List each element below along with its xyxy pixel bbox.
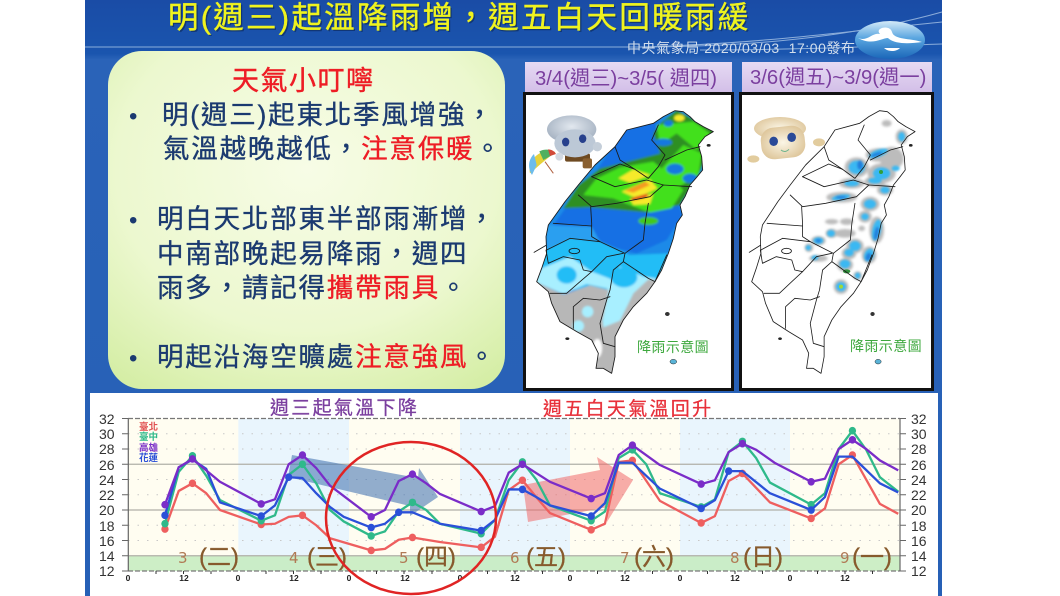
- label: rain diagram: 降雨示意圖: [637, 339, 709, 355]
- x axis hour labels: 12: [289, 573, 299, 583]
- x axis hour labels: 12: [510, 573, 520, 583]
- left axis labels: 26: [99, 457, 115, 473]
- x axis hour labels: 12: [730, 573, 740, 583]
- right axis labels: 22: [911, 487, 927, 503]
- left axis labels: [99, 411, 115, 579]
- right axis labels: 14: [911, 548, 927, 564]
- left axis labels: 16: [99, 533, 115, 549]
- panel: rain map 3/6-3/9: [740, 94, 932, 390]
- chart heading: rising: 週五白天氣溫回升: [543, 398, 713, 420]
- day labels: 7: [620, 549, 630, 567]
- left axis labels: 20: [99, 502, 115, 518]
- legend: 臺北: [139, 421, 159, 433]
- heading: tips: 天氣小叮嚀: [232, 66, 374, 96]
- x axis hour labels: [126, 573, 850, 583]
- right axis labels: 28: [911, 441, 927, 457]
- legend: 臺中: [139, 431, 158, 443]
- right axis labels: 20: [911, 502, 927, 518]
- title: 明(週三)起溫降雨增，週五白天回暖雨緩: [170, 2, 752, 36]
- line: Taipei: [161, 451, 898, 554]
- x axis hour labels: 0: [568, 573, 573, 583]
- date tab 2: [742, 62, 932, 92]
- x axis hour labels: 12: [179, 573, 189, 583]
- right axis labels: 12: [911, 563, 927, 579]
- day labels: (三): [307, 544, 347, 571]
- panel: rain map 3/4-3/5: [524, 94, 732, 390]
- panel: weather tips: [108, 51, 505, 389]
- label: rain diagram: 降雨示意圖: [850, 338, 922, 354]
- day labels: 8: [730, 549, 740, 567]
- bullet text 3: 明起沿海空曠處注意強風。: [157, 342, 497, 372]
- date tab 2: 3/6(週五)~3/9(週一): [750, 66, 926, 89]
- header swooshes: [85, 12, 942, 50]
- line: Kaohsiung: [161, 436, 898, 521]
- x axis hour labels: 0: [126, 573, 131, 583]
- bullet text 1: 明(週三)起東北季風增強，: [162, 100, 495, 130]
- callout: red circle on Thursday: [326, 442, 496, 594]
- legend: 花蓮: [139, 452, 159, 464]
- map: scattered rain: [749, 111, 915, 373]
- line: Hualien: [161, 457, 898, 534]
- bullet text 1: •: [129, 103, 137, 130]
- line: Taichung: [161, 427, 898, 540]
- x axis hour labels: 0: [347, 573, 352, 583]
- day labels: (二): [199, 544, 239, 571]
- right axis labels: 30: [911, 426, 927, 442]
- bullet text 2: 明白天北部東半部雨漸增，: [157, 204, 497, 234]
- day labels: 5: [399, 549, 409, 567]
- x axis hour labels: 0: [236, 573, 241, 583]
- day labels: (一): [852, 544, 892, 571]
- x axis hour labels: 0: [788, 573, 793, 583]
- legend: [139, 421, 159, 464]
- day labels: (四): [416, 544, 456, 571]
- arrow: temperature falling: [288, 455, 438, 516]
- icon: sunny cloud mascot: [747, 117, 825, 163]
- right axis labels: [911, 411, 927, 579]
- right axis labels: 16: [911, 533, 927, 549]
- x axis hour labels: 0: [678, 573, 683, 583]
- right axis labels: 26: [911, 457, 927, 473]
- right axis labels: 18: [911, 518, 927, 534]
- bullet text 3: •: [129, 345, 137, 372]
- issue date: 中央氣象局 2020/03/03 17:00發布: [627, 40, 856, 56]
- day labels: 9: [840, 549, 850, 567]
- panel: temperature chart: [90, 393, 938, 596]
- left axis labels: 14: [99, 548, 115, 564]
- left axis labels: 22: [99, 487, 115, 503]
- left axis labels: 24: [99, 472, 115, 488]
- day labels: 6: [510, 549, 520, 567]
- day labels: 3: [178, 549, 188, 567]
- bullet text 2: [129, 204, 497, 303]
- day labels: (日): [743, 544, 783, 571]
- bullet text 2: 雨多，請記得攜帶雨具。: [157, 273, 468, 303]
- right axis labels: 24: [911, 472, 927, 488]
- bullet text 2: 中南部晚起易降雨，週四: [157, 239, 468, 269]
- icon: CWB logo: [855, 21, 925, 59]
- x axis hour labels: 12: [620, 573, 630, 583]
- day labels: 4: [289, 549, 299, 567]
- x axis hour labels: 0: [458, 573, 463, 583]
- date tab 1: [525, 62, 732, 92]
- left axis labels: 30: [99, 426, 115, 442]
- bullet text 1: 氣溫越晚越低，注意保暖。: [163, 134, 503, 164]
- left axis labels: 28: [99, 441, 115, 457]
- legend: 高雄: [139, 442, 159, 454]
- bullet text 1: [129, 100, 503, 164]
- title: 明(週三)起溫降雨增，週五白天回暖雨緩: [168, 1, 751, 35]
- day labels: (五): [526, 544, 566, 571]
- day labels: [178, 544, 892, 571]
- x axis hour labels: 12: [400, 573, 410, 583]
- chart heading: falling: 週三起氣溫下降: [270, 397, 419, 419]
- left axis labels: 32: [99, 411, 115, 427]
- map: rain shading: [530, 107, 720, 377]
- left axis labels: 12: [99, 563, 115, 579]
- day labels: (六): [634, 544, 674, 571]
- date tab 1: 3/4(週三)~3/5( 週四): [535, 67, 717, 90]
- arrow: temperature rising: [523, 457, 633, 522]
- bullet text 2: •: [129, 207, 137, 234]
- right axis labels: 32: [911, 411, 927, 427]
- x axis hour labels: 12: [840, 573, 850, 583]
- icon: rain cloud mascot with umbrella: [529, 115, 602, 175]
- left axis labels: 18: [99, 518, 115, 534]
- day bands: [122, 418, 906, 574]
